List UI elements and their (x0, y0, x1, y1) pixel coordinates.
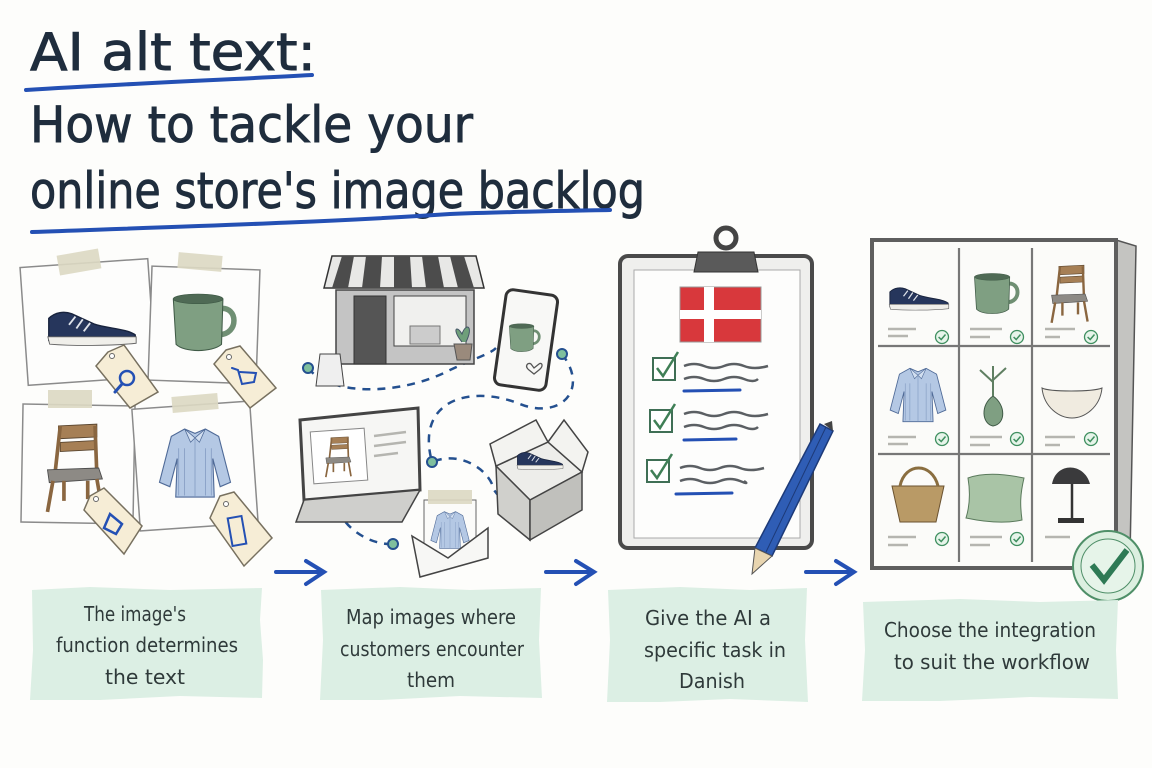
photo: mug (148, 252, 260, 384)
icon: phone (494, 289, 558, 391)
badge: approved (1073, 531, 1143, 601)
panel: customer touchpoints (296, 256, 588, 577)
path dots (303, 349, 567, 549)
cell row 1 (888, 265, 1098, 344)
cell row 2 (888, 366, 1102, 446)
title: online store's image backlog (30, 162, 645, 220)
arrow 1 (276, 561, 324, 584)
caption 3: Give the AI a (645, 606, 771, 630)
dashed journey path (308, 348, 573, 544)
panel: product grid (872, 240, 1143, 601)
checklist (647, 352, 768, 494)
caption 1 (30, 587, 263, 700)
clip (694, 228, 758, 272)
photo: shoe (20, 249, 156, 385)
caption 3: specific task in (644, 638, 786, 662)
tag: lamp (84, 488, 142, 554)
caption 2: Map images where (346, 605, 516, 629)
cell row 3 (888, 468, 1090, 546)
caption 4: Choose the integration (884, 618, 1096, 642)
clipboard board (620, 256, 812, 548)
panel: image function photos with tags (20, 249, 276, 566)
icon: envelope with shirt (412, 490, 488, 577)
title: How to tackle your (30, 96, 473, 154)
icon: laptop (296, 408, 420, 522)
caption 4 (862, 599, 1118, 701)
caption 2 (320, 587, 542, 700)
arrow 3 (806, 561, 854, 584)
frame (1110, 240, 1136, 568)
icon: Danish flag (680, 287, 761, 342)
title: AI alt text: (30, 23, 316, 83)
icon: box with shoe (490, 420, 588, 540)
panel: clipboard with Danish task (620, 228, 833, 574)
tag: magnifier (96, 345, 158, 408)
caption 1: the text (105, 665, 185, 689)
caption 3: Danish (679, 669, 745, 693)
icon: pencil (752, 421, 833, 574)
tag: cart (214, 346, 276, 408)
caption 3 (607, 587, 808, 702)
caption 2: customers encounter (340, 637, 525, 661)
arrow 2 (546, 561, 594, 584)
title (26, 23, 645, 232)
grid lines (878, 248, 1110, 562)
caption 2: them (407, 668, 455, 692)
caption 1: function determines (56, 633, 238, 657)
caption 1: The image's (83, 602, 186, 626)
photo: shirt (132, 393, 258, 531)
tag: ruler (210, 492, 272, 566)
photo: chair (21, 390, 135, 524)
paper (634, 270, 800, 538)
caption 4: to suit the workflow (894, 650, 1090, 674)
icon: store (316, 256, 484, 386)
